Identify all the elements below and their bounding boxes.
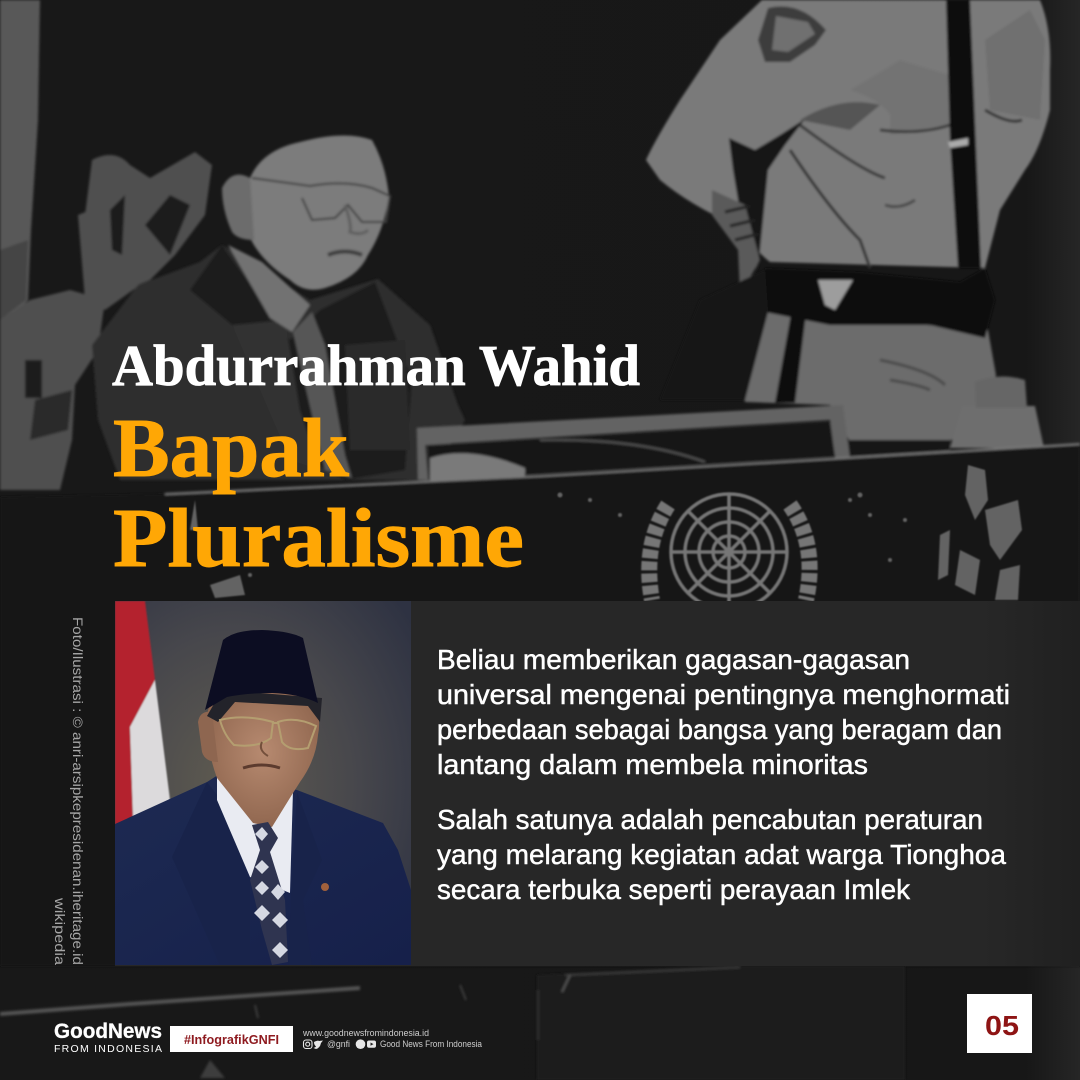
glasses [252,178,390,222]
photo credit (rotated): Foto/Ilustrasi : © anri-arsipkepresidenan.iheritage.id [70,617,85,965]
speaker's face [250,135,389,290]
body text: paragraph 1: perbedaan sebagai bangsa yang beragam dan [437,714,1002,745]
microphone button box [950,406,1044,448]
ears [198,712,218,762]
portrait photo of Abdurrahman Wahid [115,601,411,965]
panel: text background [115,601,1080,966]
body text: paragraph 1: lantang dalam membela minoritas [437,749,868,780]
officer's shirt [646,0,1050,268]
UN emblem on podium [649,494,810,610]
glasses [220,717,316,749]
photo credit (rotated): wikipedia [52,897,67,966]
stone wall at left edge [0,0,40,330]
footer: website and social handles: @gnfi [327,1039,350,1049]
footer: GoodNews From Indonesia logo: FROM INDONESIA [54,1043,162,1055]
icon: instagram [304,1040,312,1048]
belt [765,268,995,338]
suspender [946,0,981,268]
patterned tie [250,822,288,965]
arm shadow [729,119,805,270]
page number box: 05 [985,1010,1019,1041]
neck and face [207,690,319,827]
shirt [217,775,293,893]
hand at waist [712,190,760,295]
reading rail [417,405,850,480]
footer: GoodNews From Indonesia logo [54,1020,162,1055]
speaker's jacket [92,245,465,480]
Indonesian flag [115,601,170,825]
lower wall and faded streaks below the panel [0,966,905,1080]
footer: website and social handles: Good News From Indonesia [380,1039,482,1049]
footer: website and social handles [302,1028,482,1049]
lapel pin [321,883,329,891]
photo credit (rotated) [52,617,85,966]
icon: facebook [356,1039,365,1049]
lapels [172,782,250,965]
hair shadow and brows [207,690,322,722]
title: Bapak Pluralisme: Bapak [113,402,349,495]
speaker's hand [430,453,525,482]
body text: paragraph 1: universal mengenai pentingnya menghormati [437,679,1010,710]
title: name: Abdurrahman Wahid [112,333,640,398]
ear [222,175,254,240]
black lower shadow behind officer [660,270,768,400]
nose and mouth [261,742,268,756]
body text: paragraph 2: secara terbuka seperti perayaan Imlek [437,874,911,905]
title: Bapak Pluralisme: Pluralisme [113,492,524,585]
title: Bapak Pluralisme [113,402,524,585]
body text: paragraph 2: yang melarang kegiatan adat warga Tionghoa [437,839,1006,870]
footer: hashtag label: #InfografikGNFI [184,1033,279,1047]
studio backdrop [115,601,411,890]
footer: website and social handles: www.goodnewsfromindonesia.id [302,1028,429,1038]
footer: GoodNews From Indonesia logo: GoodNews [54,1020,162,1043]
black peci cap [205,630,318,710]
podium speckles [190,465,1022,600]
strap [775,314,806,403]
suit jacket [115,775,411,965]
officer's trousers [743,312,996,442]
collar and tie [228,245,310,332]
plants behind the speaker [0,152,212,490]
dark ledge under officer [848,440,950,456]
officer's shoulder patch [758,6,826,62]
body text: paragraph 2: Salah satunya adalah pencabutan peraturan [437,804,983,835]
icon: twitter [314,1040,323,1049]
podium [0,444,1080,966]
body text: paragraph 1 [437,644,1010,780]
body text: paragraph 2 [437,804,1006,905]
icon: youtube [367,1040,376,1048]
page number box [967,994,1032,1053]
footer: hashtag label [170,1026,293,1052]
body text: paragraph 1: Beliau memberikan gagasan-gagasan [437,644,910,675]
